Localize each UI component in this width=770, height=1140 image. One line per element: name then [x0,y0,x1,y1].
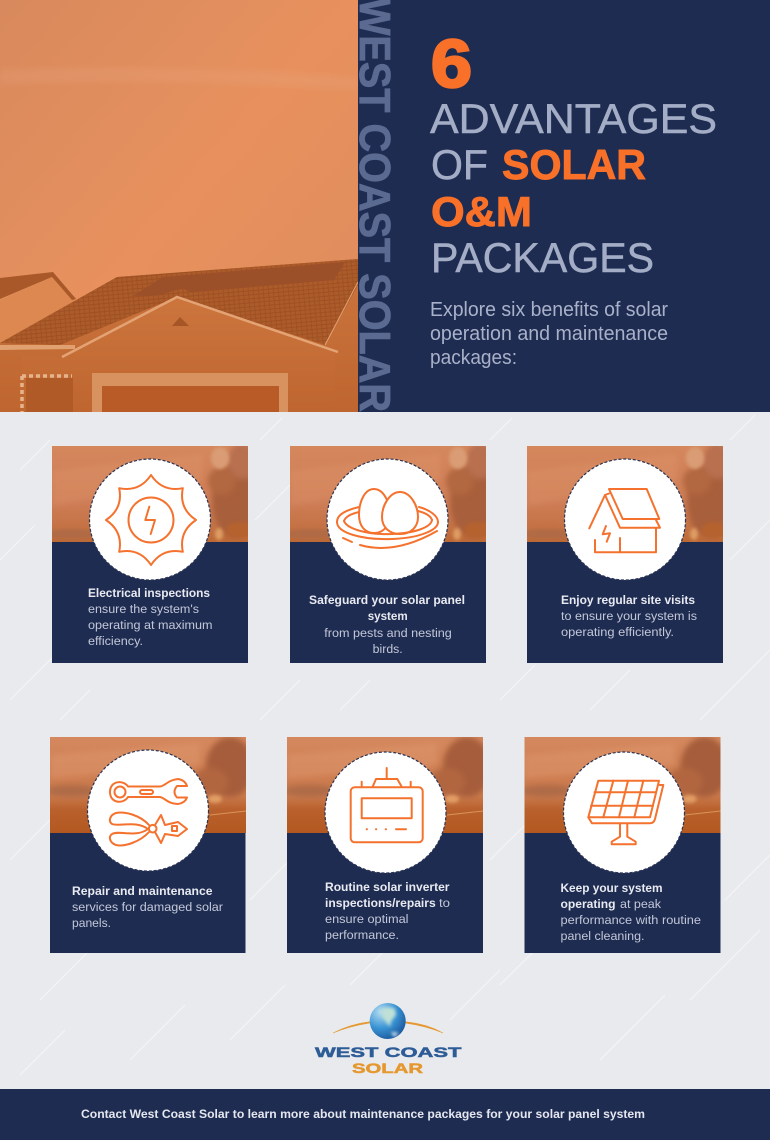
card: regular site visits: operating efficiently. [561,625,674,639]
card: inverter inspections [283,737,491,953]
intro text [430,299,668,369]
intro text: Explore six benefits of solar [430,299,668,321]
logo: West Coast Solar: SOLAR [352,1060,423,1076]
card: safeguard from birds: birds. [373,642,403,656]
card: repair and maintenance: Repair and maintenance [72,884,213,898]
icon: wrench and pliers [110,779,187,845]
icon: globe [370,1003,406,1039]
card: safeguard from birds: from pests and nesting [324,626,452,640]
card: repair and maintenance: panels. [72,916,111,930]
card: repair and maintenance [46,737,254,953]
icon: sun with lightning bolt [106,475,196,565]
title [430,26,717,281]
footer bar [0,1089,770,1140]
card: regular site visits [521,443,731,663]
card: keep system operating: operating [560,897,616,911]
card: keep system operating: panel cleaning. [560,929,644,943]
card: electrical inspections [46,443,256,663]
title: OF [431,141,488,188]
card: inverter inspections: inspections/repairs [325,896,436,910]
card: electrical inspections: operating at maximum [88,618,212,632]
intro text: operation and maintenance [430,323,668,345]
card: safeguard from birds: system [368,609,408,623]
vertical brand text: WEST COAST SOLAR [350,0,399,412]
footer bar: Contact West Coast Solar to learn more about maintenance packages for your solar panel system [81,1107,645,1121]
title: ADVANTAGES [430,95,717,142]
title: SOLAR [502,141,646,188]
intro text: packages: [430,347,517,369]
logo: West Coast Solar: WEST COAST [315,1044,462,1060]
title: O&M [431,188,532,235]
card: inverter inspections: performance. [325,928,399,942]
icon: solar panel on stand [588,781,663,844]
card: regular site visits: Enjoy regular site visits [561,593,695,607]
card: keep system operating: Keep your system [560,881,663,895]
card: repair and maintenance: services for damaged solar [72,900,223,914]
icon: nest with eggs [337,489,438,548]
title: 6 [431,26,472,102]
icon: house with solar roof [589,489,660,552]
card: keep system operating: at peak [620,897,662,911]
card: inverter inspections: to [439,896,450,910]
logo: West Coast Solar [315,1003,462,1076]
card: keep system operating: performance with routine [560,913,701,927]
header panel [358,0,770,412]
card: electrical inspections: Electrical inspections [88,586,210,600]
card: electrical inspections: ensure the system's [88,602,199,616]
card: regular site visits: to ensure your system is [561,609,697,623]
card: keep system operating [520,737,728,953]
icon: solar inverter [351,768,423,842]
card: inverter inspections: ensure optimal [325,912,408,926]
card: inverter inspections: Routine solar inverter [325,880,450,894]
title: PACKAGES [431,234,654,281]
card: safeguard from birds: Safeguard your solar panel [309,593,465,607]
header photo: house with solar roof under orange tint [0,0,358,412]
card: safeguard from birds [284,443,494,663]
card: electrical inspections: efficiency. [88,634,143,648]
